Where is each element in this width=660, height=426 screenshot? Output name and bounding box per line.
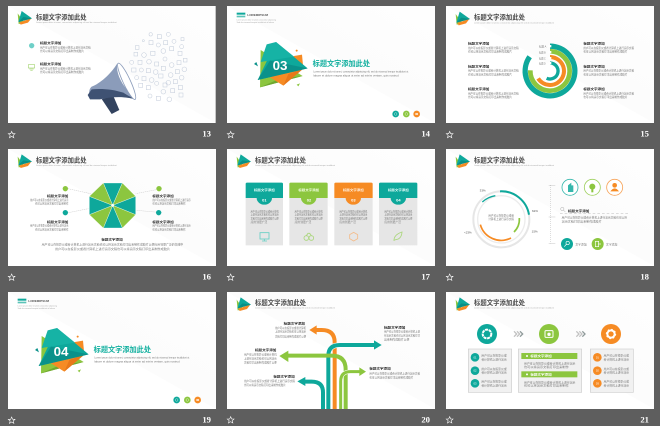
card 03: 应用到更广泛 <box>339 220 356 224</box>
text: right middle: 用户可以在投影仪或者计算机上进行演示文稿 <box>369 371 420 375</box>
subtitle: Lorem ipsum dolor sit amet, consectetur adipiscing elit sed do eiusmod tempor incididunt <box>36 164 117 167</box>
arrow: green right <box>341 367 366 409</box>
left text blocks: 也可以将演示文稿打印出来制作 <box>35 201 69 205</box>
panel: right: 用户可以在投影仪或 <box>604 367 629 371</box>
panel: middle: 标题文字添加 <box>530 371 552 376</box>
text: right top: 出来制作成胶片以便 <box>384 338 410 342</box>
subtitle: Lorem ipsum dolor sit amet, consectetur adipiscing elit sed do eiusmod tempor incididunt <box>474 164 554 167</box>
heading: 标题文字添加此处 <box>36 155 87 164</box>
left text blocks: 也可以将演示文稿打印出来制作成胶片 <box>468 95 512 99</box>
text: right middle <box>369 366 420 379</box>
star <box>8 274 15 280</box>
card 01 <box>246 183 283 245</box>
panel: middle: 用户可以在投影仪或者计算机上进行演示 <box>524 380 576 384</box>
page number: 20 <box>421 414 430 424</box>
logo <box>456 297 470 311</box>
star <box>227 131 234 138</box>
heading: 标题文字添加此处 <box>36 12 87 21</box>
panel: right: 用户可以在投影仪或 <box>604 380 629 384</box>
text block 1: 也可以将演示文稿打印出来制作成胶片 <box>40 49 84 53</box>
left text blocks: 用户可以在投影仪或者计算机上进行演示文稿 <box>468 91 519 95</box>
icon: magnifier <box>561 207 565 212</box>
heading: 标题文字添加此处 <box>474 13 525 22</box>
icon: teal dot <box>29 43 34 48</box>
slide 16: octagon umbrella <box>8 149 216 282</box>
ring labels: 15% <box>532 229 538 233</box>
icon: green camera <box>539 324 559 344</box>
text: bottom <box>244 373 295 387</box>
text: right top: 标题文字添加 <box>384 325 405 330</box>
card 02: 02 <box>307 198 312 203</box>
panel: left: 用户可以在投影仪或 <box>481 354 507 358</box>
chevrons <box>576 331 585 337</box>
card 02: 用户可以在投影仪或者计算机 <box>295 209 323 213</box>
panel: right: 02 <box>596 369 599 373</box>
page number: 19 <box>202 414 212 424</box>
section number: 04 <box>54 344 69 359</box>
text block 1: 标题文字添加 <box>40 40 61 45</box>
small logo <box>237 13 245 17</box>
icon: teal aperture <box>477 324 497 344</box>
right text blocks: 也可以将演示文稿打印出来制作 <box>152 201 186 205</box>
right text blocks: 用户可以在投影仪或者计算机上进行演示 <box>152 198 191 202</box>
section description: labore et dolore magna aliqua ut enim ad minim veniam, quis nostrud <box>313 74 399 78</box>
logo <box>18 11 32 25</box>
button: teal <box>561 238 587 250</box>
text block 2: 用户可以在投影仪或者计算机上进行演示文稿 <box>40 66 91 70</box>
subtitle: Lorem ipsum dolor sit amet, consectetur adipiscing elit sed do eiusmod tempor incididunt <box>255 307 335 310</box>
icon: green badge <box>28 65 35 70</box>
text block 2: 也可以将演示文稿打印出来制作成胶片 <box>40 70 84 74</box>
left text blocks: 也可以将演示文稿打印出来制作成胶片 <box>468 72 512 76</box>
subtitle: Lorem ipsum dolor sit amet, consectetur adipiscing elit sed do eiusmod tempor incididunt <box>36 21 117 24</box>
ring labels: 33% <box>480 188 486 192</box>
ring labels: 标题 B <box>539 50 546 54</box>
heading: 标题文字添加此处 <box>255 298 306 307</box>
card 03: 上进行演示文稿也可以将演示 <box>339 213 368 217</box>
button: green: 文字添加 <box>606 242 618 246</box>
star <box>227 417 234 423</box>
page number: 18 <box>640 272 650 282</box>
left text blocks: 用户可以在投影仪或者计算机上进行演示 <box>30 198 69 202</box>
panel: left: 者计算机上进行演示 <box>481 357 507 361</box>
card 04: 文稿打印出来制作成胶片以便 <box>384 216 413 220</box>
left text blocks: 标题文字添加 <box>468 86 489 91</box>
right text blocks: 用户可以在投影仪或者计算机上进行演示文稿 <box>583 91 634 95</box>
arrow: teal left <box>297 377 323 409</box>
slide 18: ring progress and icons <box>446 149 654 282</box>
panel: left: 者计算机上进行演示 <box>481 371 507 375</box>
text: bottom: 用户可以在投影仪或者计算机上进行演示文稿 <box>244 379 295 383</box>
octagon <box>89 183 136 228</box>
ring chart <box>473 191 529 247</box>
panel: left: 01 <box>474 355 477 359</box>
logo <box>18 154 32 168</box>
icon: orange gear <box>601 324 621 344</box>
card 02: 标题文字添加 <box>298 187 319 192</box>
small description: Sed do eiusmod tempor incididunt ut labore <box>237 21 275 24</box>
section description: labore et dolore magna aliqua ut enim ad minim veniam, quis nostrud <box>94 360 180 364</box>
section title: 标题文字添加此处 <box>94 345 152 354</box>
panel: left: 02 <box>474 369 477 373</box>
small description <box>237 19 276 24</box>
left text blocks: 用户可以在投影仪或者计算机上进行演示文稿 <box>468 46 519 50</box>
text: left: 用户可以在投影仪或者计算机 <box>244 352 277 356</box>
text: left: 标题文字添加 <box>255 347 276 352</box>
panel: right: 者计算机上进行演示 <box>604 383 629 387</box>
subtitle: Lorem ipsum dolor sit amet, consectetur adipiscing elit sed do eiusmod tempor incididunt <box>474 307 554 310</box>
section description <box>313 70 409 78</box>
text block 2: 标题文字添加 <box>40 61 61 66</box>
ring labels: 标题 A <box>539 44 547 48</box>
small description <box>18 305 57 310</box>
slide 15: concentric ring chart <box>446 6 654 139</box>
right text blocks: 标题文字添加 <box>583 86 605 91</box>
left text blocks: 标题文字添加 <box>468 63 489 68</box>
card 04: 标题文字添加 <box>388 187 409 192</box>
slide 14: section 03 <box>227 6 435 139</box>
panel: left: 03 <box>474 381 477 385</box>
ring labels: 标题 C <box>539 57 546 61</box>
card 04 <box>379 183 417 245</box>
text block <box>560 208 629 224</box>
panel: right: 01 <box>596 355 599 359</box>
card 01: 文稿打印出来制作成胶片以便 <box>251 216 279 220</box>
section description: Lorem ipsum dolor sit amet, consectetur adipiscing elit, sed do eiusmod tempor incididunt ut <box>94 356 190 360</box>
bottom icons <box>173 397 201 403</box>
star <box>446 131 453 138</box>
section title: 标题文字添加此处 <box>313 59 371 68</box>
star <box>227 274 234 280</box>
left text blocks: 标题文字添加 <box>47 193 68 198</box>
left text blocks: 标题文字添加 <box>47 219 68 224</box>
left text blocks: 也可以将演示文稿打印出来制作成胶片 <box>468 50 512 54</box>
card 04: 上进行演示文稿也可以将演示 <box>384 213 413 217</box>
card 01: 用户可以在投影仪或者计算机 <box>251 209 279 213</box>
panel: left: 用户可以在投影仪或 <box>481 367 507 371</box>
panel: middle: 标题文字添加 <box>530 353 552 358</box>
heading: 标题文字添加此处 <box>474 155 525 164</box>
panel: right: 者计算机上进行演示 <box>604 357 629 361</box>
text: left: 文稿打印出来制作成胶片以便 <box>244 361 277 365</box>
bottom text block <box>42 237 184 251</box>
text: right top: 行演示文稿也可以将演示文稿打印 <box>384 334 420 338</box>
left text blocks: 用户可以在投影仪或者计算机上进行演示 <box>30 224 69 228</box>
page number: 14 <box>421 129 431 139</box>
page number: 17 <box>421 272 431 282</box>
slide 17: four cards <box>227 149 435 282</box>
card 01: 01 <box>262 198 267 203</box>
right text blocks: 也可以将演示文稿打印出来制作 <box>152 227 186 231</box>
slide 19: section 04 <box>8 292 216 424</box>
logo <box>237 154 251 168</box>
star <box>8 417 15 423</box>
text block 2 <box>40 61 91 74</box>
panel: right: 用户可以在投影仪或 <box>604 354 629 358</box>
small logo <box>18 299 26 303</box>
logo <box>237 297 251 311</box>
text: right top: 用户可以在投影仪或者计算机上进 <box>384 330 420 334</box>
button: teal: 文字添加 <box>575 242 587 246</box>
right text blocks: 标题文字添加 <box>583 41 605 46</box>
page number: 16 <box>202 272 212 282</box>
vertical scale <box>549 185 555 244</box>
bottom text block: 用户可以在投影仪或者计算机上进行演示文稿也可以将演示文稿打印出来制作成胶片以便应用到更广泛的领域中 <box>42 243 184 247</box>
ring centre text: 计算机上进行演示文稿 <box>488 217 514 221</box>
bottom text block: 用户可以在投影仪或者计算机上进行演示文稿也可以将演示文稿打印出来制作成胶片 <box>55 247 170 251</box>
panel: middle <box>518 349 582 392</box>
heading: 标题文字添加此处 <box>474 298 525 307</box>
right text blocks: 标题文字添加 <box>152 219 174 224</box>
section number: 03 <box>273 58 287 73</box>
subtitle: Lorem ipsum dolor sit amet, consectetur adipiscing elit sed do eiusmod tempor incididunt <box>474 21 554 24</box>
card 04: 用户可以在投影仪或者计算机 <box>384 209 413 213</box>
arrow: orange left <box>309 325 335 409</box>
card 03: 标题文字添加 <box>343 187 364 192</box>
left text blocks: 也可以将演示文稿打印出来制作 <box>35 227 69 231</box>
ring centre text: 用户可以在投影仪或者 <box>488 214 514 218</box>
text: top: 文稿打印出来制作成胶片以便 <box>275 334 306 338</box>
right text blocks: 用户可以在投影仪或者计算机上进行演示 <box>152 224 191 228</box>
brand text: LOREMIPSUM <box>28 301 49 303</box>
text: bottom: 标题文字添加 <box>273 373 295 378</box>
text: left <box>244 347 277 365</box>
ring labels: <23% <box>464 231 472 235</box>
megaphone <box>88 62 138 114</box>
text: top: 标题文字添加 <box>284 320 305 325</box>
small description: Lorem ipsum dolor sit amet consectetur adipiscing <box>237 19 276 22</box>
text block: 演示文稿打印出来制作成胶片 <box>562 220 602 224</box>
text: top: 上进行演示文稿也可以将演示 <box>275 330 306 334</box>
chevrons <box>514 331 523 337</box>
card 02 <box>289 183 328 245</box>
bottom text block: 标题文字添加 <box>101 237 123 242</box>
left text blocks <box>468 41 519 99</box>
icon: orange ring <box>607 179 623 195</box>
section description <box>94 356 190 364</box>
right text blocks: 也可以将演示文稿打印出来制作成胶片 <box>583 72 628 76</box>
card 03 <box>334 183 373 245</box>
text: top: 用户可以在投影仪或者计算机 <box>275 326 306 330</box>
card 01: 上进行演示文稿也可以将演示 <box>251 213 279 217</box>
ring centre text <box>488 214 514 221</box>
text block: 用户可以在投影仪或者计算机上进行演示文稿也可以将 <box>562 215 627 219</box>
slide 20: arrows <box>227 292 435 424</box>
bottom icons <box>392 111 420 117</box>
subtitle: Lorem ipsum dolor sit amet, consectetur adipiscing elit sed do eiusmod tempor incididunt <box>255 164 335 167</box>
arrow: green left <box>279 351 346 409</box>
right text blocks <box>152 193 191 231</box>
star <box>446 417 453 423</box>
panel: right: 03 <box>596 381 599 385</box>
right text blocks: 用户可以在投影仪或者计算机上进行演示文稿 <box>583 46 634 50</box>
ring chart <box>525 45 575 96</box>
section description: Lorem ipsum dolor sit amet, consectetur adipiscing elit, sed do eiusmod tempor incididunt ut <box>313 70 409 74</box>
right text blocks <box>583 41 634 99</box>
card 03: 03 <box>351 198 356 203</box>
right text blocks: 也可以将演示文稿打印出来制作成胶片 <box>583 95 628 99</box>
brand text: LOREMIPSUM <box>247 15 268 17</box>
text: right top <box>384 325 420 342</box>
panel: middle: 也可以将演示文稿打印出来制作 <box>524 384 569 388</box>
card 02: 上进行演示文稿也可以将演示 <box>295 213 323 217</box>
text: top <box>275 320 306 338</box>
connector lines <box>68 189 162 213</box>
card 03: 用户可以在投影仪或者计算机 <box>339 209 368 213</box>
right text blocks: 标题文字添加 <box>152 193 174 198</box>
small description: Lorem ipsum dolor sit amet consectetur adipiscing <box>18 305 57 308</box>
panel: right <box>590 349 633 392</box>
right text blocks: 也可以将演示文稿打印出来制作成胶片 <box>583 50 628 54</box>
small description: Sed do eiusmod tempor incididunt ut labore <box>18 307 56 310</box>
star <box>446 274 453 280</box>
page number: 15 <box>640 129 650 139</box>
text block 1: 用户可以在投影仪或者计算机上进行演示文稿 <box>40 45 91 49</box>
left text blocks: 标题文字添加 <box>468 41 489 46</box>
icon cloud <box>130 32 187 102</box>
text: right middle: 也可以将演示文稿打印出来制作成胶片 <box>369 375 414 379</box>
text block: 标题文字添加 <box>568 208 589 213</box>
panel: left: 用户可以在投影仪或 <box>481 380 507 384</box>
card 02: 应用到更广泛 <box>295 220 312 224</box>
icon: teal ring <box>562 179 578 195</box>
slide 13: megaphone <box>8 6 216 139</box>
button: green <box>592 238 618 250</box>
ring labels <box>539 44 547 66</box>
arrow: teal right <box>328 340 382 409</box>
text block 1 <box>40 40 91 53</box>
card 03: 文稿打印出来制作成胶片以便 <box>339 216 368 220</box>
panel: left: 者计算机上进行演示 <box>481 383 507 387</box>
card 01: 标题文字添加 <box>254 187 275 192</box>
right text blocks: 用户可以在投影仪或者计算机上进行演示文稿 <box>583 69 634 73</box>
heading: 标题文字添加此处 <box>255 155 306 164</box>
card 04: 应用到更广泛 <box>384 220 401 224</box>
card 04: 04 <box>396 198 401 203</box>
node dots <box>63 186 162 215</box>
card 02: 文稿打印出来制作成胶片以便 <box>295 216 323 220</box>
ring labels: 62% <box>532 209 538 213</box>
panel: middle: 也可以将演示文稿打印出来制作 <box>524 365 569 369</box>
star <box>8 131 15 138</box>
card 01: 应用到更广泛 <box>251 220 268 224</box>
text: left: 上进行演示文稿也可以将演示 <box>244 356 277 360</box>
right text blocks: 标题文字添加 <box>583 63 605 68</box>
panel: left <box>468 349 512 392</box>
ring labels: 标题 D <box>539 62 546 66</box>
text: bottom: 也可以将演示文稿打印出来制作成胶片 <box>244 383 286 387</box>
left text blocks: 用户可以在投影仪或者计算机上进行演示文稿 <box>468 69 519 73</box>
polygon emblem <box>254 42 308 87</box>
logo <box>456 154 470 168</box>
page number: 13 <box>202 129 212 139</box>
panel: right: 者计算机上进行演示 <box>604 371 629 375</box>
text: right middle: 标题文字添加 <box>369 366 391 371</box>
icon: green ring <box>584 179 600 195</box>
left text blocks <box>30 193 69 231</box>
page number: 21 <box>640 414 649 424</box>
logo <box>456 12 470 25</box>
slide 21: process panels <box>446 292 654 424</box>
panel: middle: 用户可以在投影仪或者计算机上进行演示 <box>524 362 576 366</box>
ring labels <box>464 188 538 235</box>
polygon emblem <box>35 328 89 373</box>
